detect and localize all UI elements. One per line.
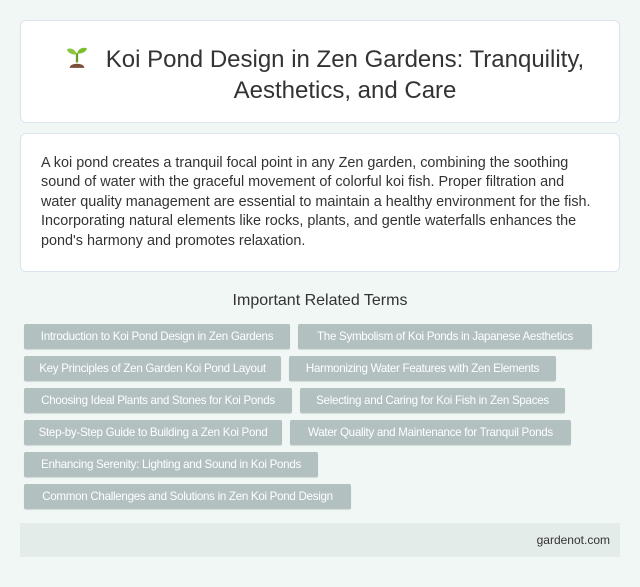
intro text card: A koi pond creates a tranquil focal point in any Zen garden, combining the soothing [41,155,568,171]
intro text card: pond's harmony and promotes relaxation. [41,233,305,249]
footer: gardenot.com [537,533,610,547]
heading: related terms: Important Related Terms [233,292,407,309]
intro text card: water quality management are essential to maintain a healthy environment for the fish. [41,194,591,210]
icon: sprout [66,48,87,68]
intro text card: Incorporating natural elements like rocks, plants, and gentle waterfalls enhances the [41,213,576,229]
title: Koi Pond Design in Zen Gardens: Tranquility, Aesthetics, and Care [106,46,584,104]
tags: Key Principles of Zen Garden Koi Pond Layout [39,362,266,375]
tags: Water Quality and Maintenance for Tranquil Ponds [308,426,553,439]
tags: Step-by-Step Guide to Building a Zen Koi Pond [39,426,267,439]
tags: Choosing Ideal Plants and Stones for Koi Ponds [41,394,275,407]
tags: Introduction to Koi Pond Design in Zen Gardens [41,330,273,343]
tags: Selecting and Caring for Koi Fish in Zen Spaces [316,394,549,407]
intro text card: sound of water with the graceful movement of colorful koi fish. Proper filtration and [41,174,564,190]
title card [20,20,620,123]
tags: The Symbolism of Koi Ponds in Japanese Aesthetics [317,330,573,343]
tags: Common Challenges and Solutions in Zen Koi Pond Design [42,490,333,503]
tags: Enhancing Serenity: Lighting and Sound in Koi Ponds [41,458,301,471]
intro text card [20,133,620,272]
tags: Harmonizing Water Features with Zen Elements [306,362,539,375]
footer [20,523,620,557]
